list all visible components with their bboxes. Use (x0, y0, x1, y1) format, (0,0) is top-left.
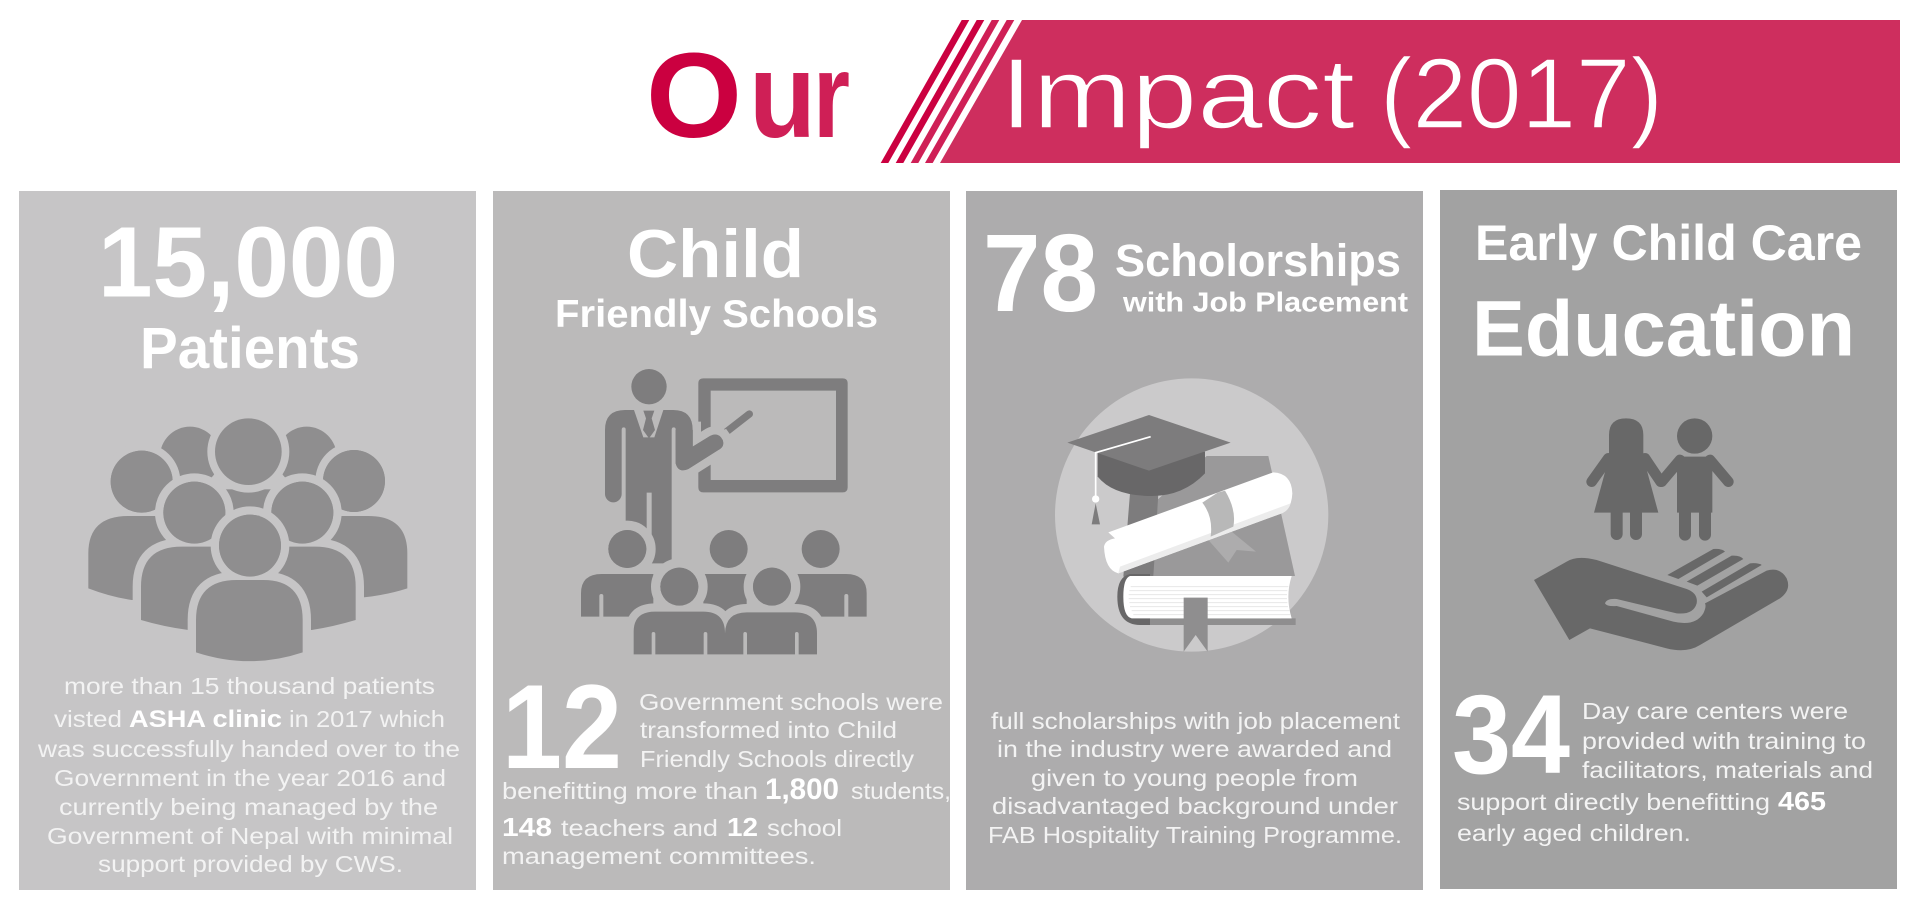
heading: Child Friendly Schools (555, 216, 878, 336)
body text: patients: currently being managed by the (59, 794, 438, 820)
body text: schools: teachers and (561, 815, 718, 841)
body text: schools: benefitting more than (502, 778, 758, 804)
body text: scholarships: FAB Hospitality Training Programme. (988, 822, 1402, 848)
panel: patients (19, 191, 476, 890)
heading: Early Child Care Education: Education (1472, 284, 1855, 372)
heading: 15,000 Patients: 15,000 (98, 206, 398, 318)
heading: Child Friendly Schools: Child (627, 216, 804, 292)
heading: 78 Scholorships with Job Placement: Scholorships (1115, 235, 1401, 286)
body text: scholarships: in the industry were awarded and (997, 736, 1392, 762)
heading: 78 Scholorships with Job Placement: 78 (983, 212, 1098, 335)
heading: 78 Scholorships with Job Placement (983, 212, 1408, 335)
body text: patients (37, 673, 460, 877)
body text: scholarships: given to young people from (1031, 765, 1358, 791)
body text: day care (1457, 698, 1873, 846)
icon: graduation cap, diploma and book (1055, 378, 1328, 652)
body text: scholarships: full scholarships with job placement (991, 708, 1401, 734)
icon: teacher with students (581, 369, 867, 654)
title word: Our: u (749, 27, 816, 163)
icon: children over a hand (1534, 418, 1788, 650)
body text: schools: Friendly Schools directly (640, 746, 915, 772)
body text: day care: support directly benefitting (1457, 789, 1770, 815)
body text: patients: more than 15 thousand patients (64, 673, 435, 699)
panel: child friendly schools (493, 191, 951, 890)
body text: schools: school (767, 815, 842, 841)
heading: Child Friendly Schools: Friendly Schools (555, 293, 878, 336)
body text: day care: Day care centers were (1582, 698, 1848, 724)
banner title text: Impact (1000, 38, 1355, 150)
panel: scholarships (966, 191, 1423, 890)
body text: patients: Government in the year 2016 and (54, 765, 446, 791)
icon: crowd of people (88, 418, 407, 661)
body text: schools: management committees. (502, 843, 816, 869)
body text: patients: was successfully handed over to the (37, 736, 460, 762)
body text: schools: 12 (727, 812, 758, 842)
body text: schools: 1,800 (765, 773, 839, 806)
big number: 34: 34 (1452, 672, 1570, 797)
body text: schools: transformed into Child (640, 717, 897, 743)
title word: Our: r (813, 27, 850, 163)
body text: schools: students, (851, 778, 951, 804)
body text: scholarships (988, 708, 1402, 848)
title word: Our (646, 27, 850, 163)
body text: scholarships: disadvantaged background under (992, 793, 1398, 819)
body text: schools: 148 (502, 812, 552, 842)
title word: Our: O (646, 27, 742, 163)
body text: day care: early aged children. (1457, 820, 1691, 846)
heading: 15,000 Patients: Patients (140, 316, 360, 381)
body text: patients: visted (54, 706, 122, 732)
heading: 78 Scholorships with Job Placement: with Job Placement (1122, 286, 1408, 318)
body text: day care: facilitators, materials and (1582, 757, 1873, 783)
body text: schools (502, 689, 951, 869)
body text: patients: in 2017 which (289, 706, 445, 732)
big number: 12: 12 (502, 660, 622, 794)
body text: patients: support provided by CWS. (98, 851, 403, 877)
panel: early child care education (1440, 190, 1897, 889)
heading: Early Child Care Education: Early Child Care (1475, 215, 1862, 271)
body text: patients: Government of Nepal with minimal (47, 823, 453, 849)
title banner with stripes (881, 20, 1900, 163)
banner title text: (2017) (1380, 38, 1663, 150)
body text: patients: ASHA clinic (129, 706, 282, 733)
body text: day care: 465 (1778, 786, 1826, 816)
body text: day care: provided with training to (1582, 728, 1866, 754)
body text: schools: Government schools were (639, 689, 943, 715)
banner title text (1000, 38, 1663, 150)
heading: Early Child Care Education (1472, 215, 1862, 372)
heading: 15,000 Patients (98, 206, 398, 381)
